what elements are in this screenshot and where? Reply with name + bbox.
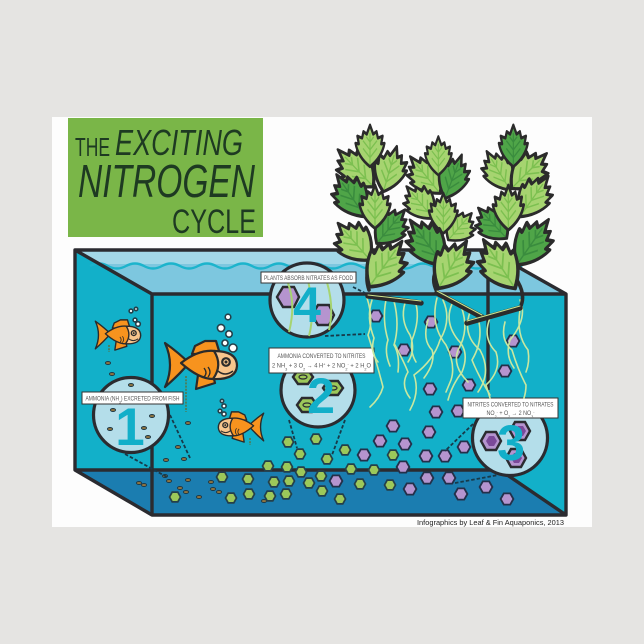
step 3 circle: nitrites converted to nitrates: NO2- + O2 → 2 NO3- bbox=[486, 408, 535, 418]
plant 1 bbox=[322, 125, 418, 298]
aquarium tank bbox=[75, 250, 566, 515]
nitrite hexagons (green) bbox=[170, 434, 398, 504]
credit line: Infographics by Leaf & Fin Aquaponics, 2013 bbox=[417, 518, 564, 527]
step 2 circle: ammonia converted to nitrites: AMMONIA CONVERTED TO NITRITES bbox=[278, 354, 366, 360]
step 3 circle: nitrites converted to nitrates: 3 bbox=[497, 415, 525, 471]
title bbox=[68, 118, 263, 241]
bubbles bbox=[129, 307, 237, 416]
fish: top left bbox=[95, 320, 141, 350]
title: THE bbox=[75, 132, 110, 162]
step 2 circle: ammonia converted to nitrites bbox=[269, 348, 374, 427]
plant 2 bbox=[395, 137, 483, 298]
ammonia particles bbox=[105, 362, 267, 502]
step 1 circle: ammonia excreted from fish: AMMONIA (NH3) EXCRETED FROM FISH bbox=[86, 396, 180, 404]
step 4 circle: plants absorb nitrates bbox=[261, 263, 356, 337]
step 2 circle: ammonia converted to nitrites: 2 NH3 + 3 O2 → 4 H+ + 2 NO2- + 2 H2O bbox=[272, 361, 371, 371]
title: CYCLE bbox=[172, 203, 256, 241]
plant 3 bbox=[466, 125, 563, 299]
step 1 circle: ammonia excreted from fish: 1 bbox=[115, 398, 145, 457]
white card bbox=[52, 117, 592, 527]
plant roots bbox=[367, 298, 529, 410]
title: EXCITING bbox=[115, 122, 243, 163]
step 3 circle: nitrites converted to nitrates: NITRITES CONVERTED TO NITRATES bbox=[468, 402, 554, 408]
step 3 circle: nitrites converted to nitrates bbox=[463, 398, 558, 476]
fish waste trails bbox=[109, 345, 250, 445]
dashed connector lines bbox=[125, 287, 498, 483]
plants (three leaf stems) bbox=[322, 125, 563, 299]
step 4 circle: plants absorb nitrates: 4 bbox=[293, 277, 321, 333]
nitrate hexagons (purple) bbox=[330, 310, 519, 505]
step 1 circle: ammonia excreted from fish bbox=[82, 378, 183, 457]
fish: bottom bbox=[218, 412, 264, 442]
fish: large bbox=[165, 341, 237, 389]
step 2 circle: ammonia converted to nitrites: 2 bbox=[307, 368, 335, 424]
title: NITROGEN bbox=[78, 155, 256, 207]
plant rhizomes and stems bbox=[367, 262, 523, 323]
step 4 circle: plants absorb nitrates: PLANTS ABSORB NITRATES AS FOOD bbox=[264, 276, 354, 282]
